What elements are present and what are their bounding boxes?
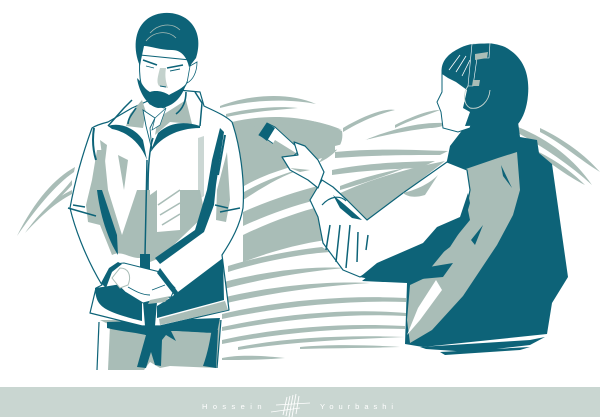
author name right: Yourbashi xyxy=(320,402,398,411)
extended sleeve xyxy=(310,162,470,282)
head and hair xyxy=(437,43,528,132)
figure: reporter woman xyxy=(259,43,568,355)
headphones xyxy=(464,43,490,108)
figure: interviewee man xyxy=(68,13,243,370)
jacket collar and shirt xyxy=(108,92,202,160)
jacket dark back xyxy=(362,122,568,355)
author name left: Hossein xyxy=(202,402,267,411)
footer banner with signature xyxy=(0,387,600,417)
jacket body xyxy=(68,90,243,335)
trousers xyxy=(97,318,221,370)
hand and microphone xyxy=(259,123,324,188)
background: sweeping sage brush strokes xyxy=(17,96,600,360)
clasped hands xyxy=(101,262,178,304)
signature mark xyxy=(271,394,310,417)
head xyxy=(136,13,198,108)
